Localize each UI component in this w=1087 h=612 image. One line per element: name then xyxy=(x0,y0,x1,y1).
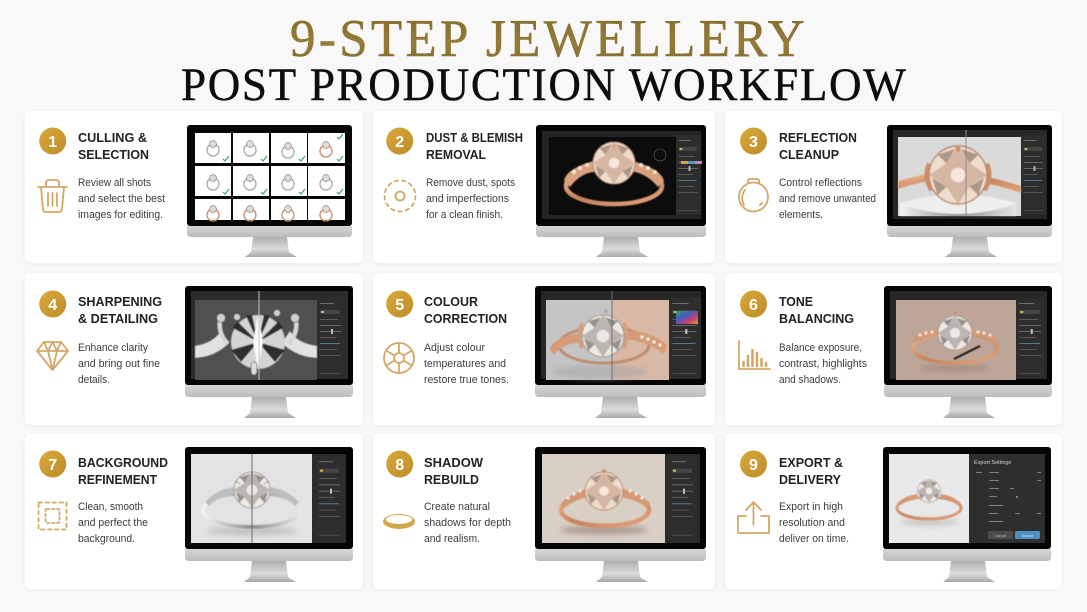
description 4: Enhance clarity xyxy=(78,342,148,354)
description 7: and perfect the xyxy=(78,517,148,529)
panel: step 6 tone balancing xyxy=(725,273,1062,425)
badge 1: 1 xyxy=(48,134,57,151)
title line: post production workflow: POST PRODUCTION WORKFLOW xyxy=(181,58,906,110)
description 2: and imperfections xyxy=(426,193,509,205)
badge 4 xyxy=(39,290,66,318)
description 8: Create natural xyxy=(424,501,490,513)
badge 3: 3 xyxy=(749,134,758,151)
description 8 xyxy=(424,501,511,545)
description 6 xyxy=(779,342,867,386)
description 7: background. xyxy=(78,533,135,545)
panel: step 4 sharpening and detailing xyxy=(25,273,363,425)
monitor: ring with rebuilt shadow xyxy=(535,447,706,582)
heading 5: COLOUR xyxy=(424,294,479,309)
heading 9: DELIVERY xyxy=(779,472,841,487)
description 2 xyxy=(426,177,515,221)
panel: step 3 reflection cleanup xyxy=(725,111,1062,263)
heading 3: CLEANUP xyxy=(779,147,839,162)
badge 7 xyxy=(39,450,66,478)
description 2: Remove dust, spots xyxy=(426,177,515,189)
monitor: export settings dialog xyxy=(883,447,1051,582)
heading 8: SHADOW xyxy=(424,455,484,470)
monitor: split colour correction xyxy=(535,286,706,418)
monitor: tone balanced ring xyxy=(884,286,1052,418)
monitor: silver ring on clean background xyxy=(185,447,353,582)
icon: ring shadow ellipse xyxy=(383,514,415,529)
description 5: temperatures and xyxy=(424,358,506,370)
icon: export arrow xyxy=(738,502,769,533)
badge 9: 9 xyxy=(749,457,758,474)
heading 2: REMOVAL xyxy=(426,147,486,162)
heading 4: & DETAILING xyxy=(78,311,158,326)
panel: step 7 background refinement xyxy=(25,434,363,589)
badge 7: 7 xyxy=(48,457,57,474)
description 4: details. xyxy=(78,374,110,386)
button: cancel: Cancel xyxy=(995,534,1007,538)
description 7 xyxy=(78,501,148,545)
description 3 xyxy=(779,177,876,221)
monitor: reflection before and after xyxy=(887,125,1052,257)
description 9: resolution and xyxy=(779,517,845,529)
description 1: images for editing. xyxy=(78,209,163,221)
button: export xyxy=(1015,531,1040,539)
monitor: rose gold ring on black xyxy=(536,125,706,257)
monitor: export settings dialog: Export Settings xyxy=(974,460,1012,466)
heading 5 xyxy=(424,294,507,326)
description 8: and realism. xyxy=(424,533,480,545)
description 7: Clean, smooth xyxy=(78,501,143,513)
icon: trash bin xyxy=(38,180,67,212)
badge 6: 6 xyxy=(749,297,758,314)
description 2: for a clean finish. xyxy=(426,209,503,221)
monitor: high contrast stone detail xyxy=(185,286,353,418)
heading 9 xyxy=(779,455,843,487)
description 9: deliver on time. xyxy=(779,533,849,545)
heading 4 xyxy=(78,294,162,326)
icon: polished ring xyxy=(739,179,768,212)
description 4: and bring out fine xyxy=(78,358,160,370)
description 4 xyxy=(78,342,160,386)
panel: step 2 dust and blemish removal xyxy=(373,111,715,263)
description 6: and shadows. xyxy=(779,374,841,386)
description 3: and remove unwanted xyxy=(779,193,876,205)
heading 9: EXPORT & xyxy=(779,455,843,470)
badge 9 xyxy=(740,450,767,478)
heading 8: REBUILD xyxy=(424,472,479,487)
icon: dust circle xyxy=(384,180,416,212)
panel: step 1 culling and selection xyxy=(25,111,363,263)
heading 5: CORRECTION xyxy=(424,311,507,326)
title xyxy=(181,10,906,110)
heading 4: SHARPENING xyxy=(78,294,162,309)
description 3: elements. xyxy=(779,209,823,221)
button: export: Export xyxy=(1022,534,1034,538)
description 9: Export in high xyxy=(779,501,843,513)
description 9 xyxy=(779,501,849,545)
badge 5: 5 xyxy=(395,297,404,314)
heading 8 xyxy=(424,455,484,487)
description 6: contrast, highlights xyxy=(779,358,867,370)
description 6: Balance exposure, xyxy=(779,342,862,354)
title line: 9-step jewellery: 9-STEP JEWELLERY xyxy=(290,10,805,68)
panel: step 5 colour correction xyxy=(373,273,715,425)
badge 8: 8 xyxy=(395,457,404,474)
heading 3 xyxy=(779,130,857,162)
description 1: Review all shots xyxy=(78,177,151,189)
description 8: shadows for depth xyxy=(424,517,511,529)
description 1 xyxy=(78,177,166,221)
heading 7: BACKGROUND xyxy=(78,455,168,470)
heading 3: REFLECTION xyxy=(779,130,857,145)
description 5: restore true tones. xyxy=(424,374,509,386)
description 5 xyxy=(424,342,509,386)
badge 5 xyxy=(386,290,413,318)
icon: diamond xyxy=(37,342,68,370)
panel: step 9 export and delivery xyxy=(725,434,1062,589)
description 5: Adjust colour xyxy=(424,342,485,354)
description 3: Control reflections xyxy=(779,177,862,189)
heading 6: BALANCING xyxy=(779,311,854,326)
heading 2: DUST & BLEMISH xyxy=(426,130,523,145)
icon: dashed selection squares xyxy=(38,502,66,530)
heading 6: TONE xyxy=(779,294,813,309)
button: cancel xyxy=(988,531,1013,539)
icon: histogram xyxy=(739,341,770,369)
badge 1 xyxy=(39,128,66,154)
badge 2: 2 xyxy=(395,134,404,151)
badge 8 xyxy=(386,450,413,478)
heading 7: REFINEMENT xyxy=(78,472,157,487)
monitor: contact sheet with checkmarks xyxy=(187,125,352,257)
description 1: and select the best xyxy=(78,193,166,205)
panel: step 8 shadow rebuild xyxy=(373,434,715,589)
heading 1: CULLING & xyxy=(78,130,147,145)
heading 1 xyxy=(78,130,149,162)
badge 6 xyxy=(740,290,767,318)
badge 4: 4 xyxy=(48,297,57,314)
badge 2 xyxy=(386,128,413,154)
icon: colour wheel xyxy=(384,343,414,373)
heading 6 xyxy=(779,294,854,326)
heading 7 xyxy=(78,455,168,487)
heading 2 xyxy=(426,130,523,162)
heading 1: SELECTION xyxy=(78,147,149,162)
badge 3 xyxy=(740,128,767,154)
